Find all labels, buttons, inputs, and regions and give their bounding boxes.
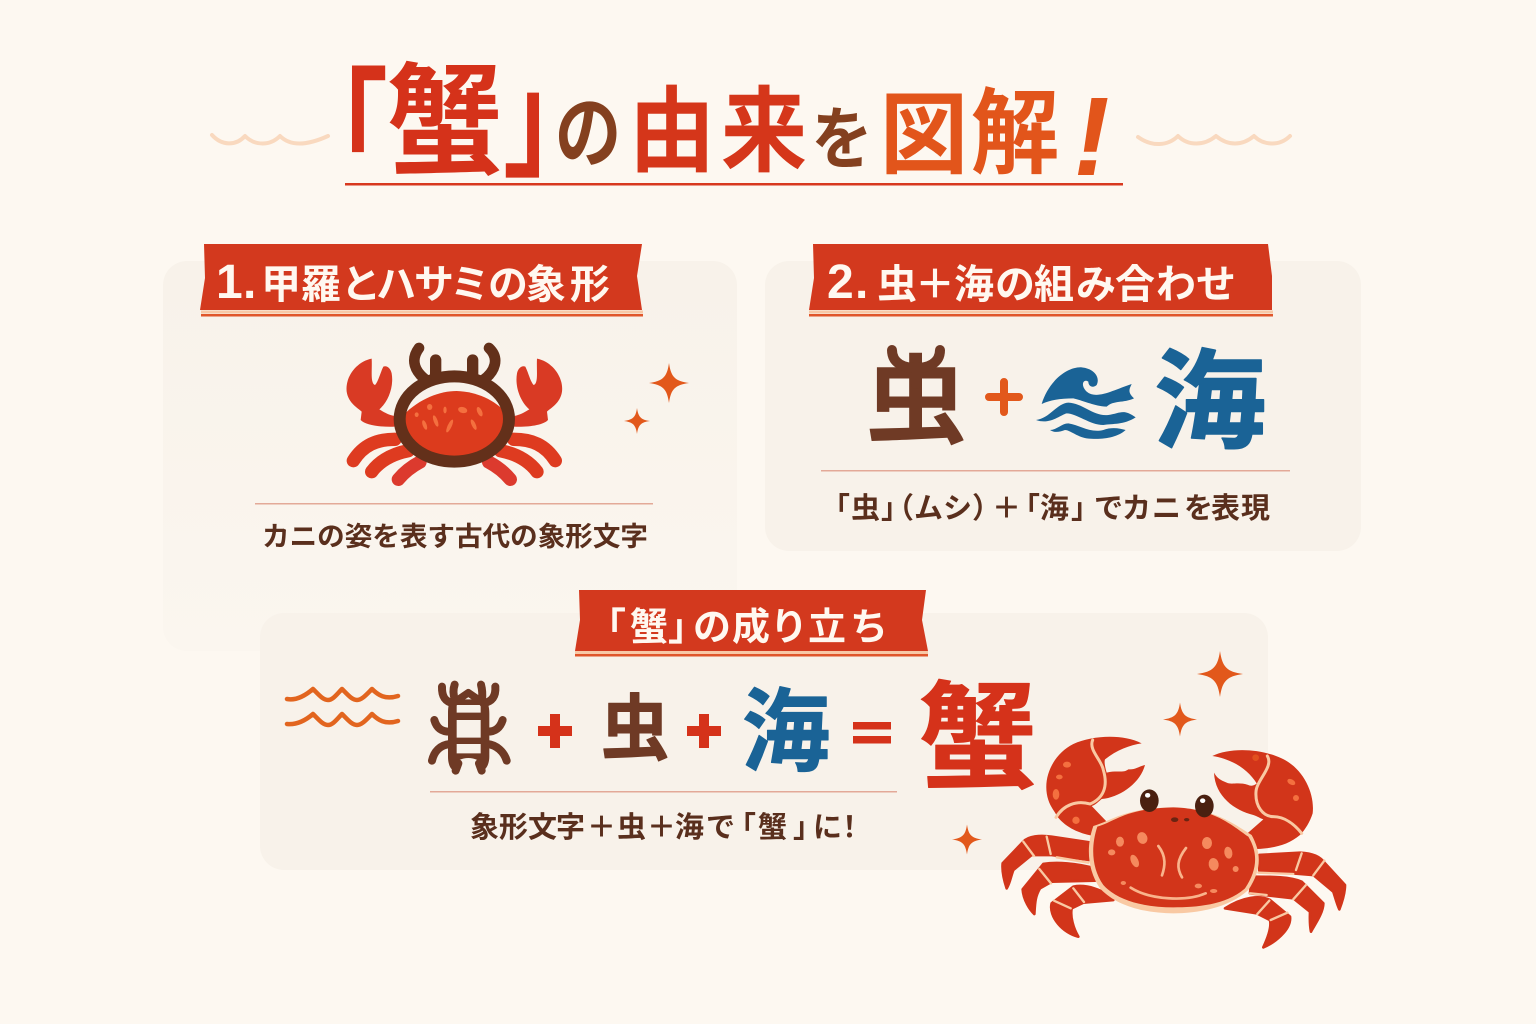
title text: 図 — [880, 84, 968, 185]
title text: 蟹 — [387, 56, 503, 191]
title text: ! — [1063, 74, 1122, 199]
character: insect small: 虫 — [601, 688, 669, 769]
icon: sparkle middle panel 3 — [1163, 702, 1197, 736]
large crab legs — [1002, 836, 1345, 947]
glyph body — [448, 699, 489, 770]
small crab shell — [399, 376, 509, 462]
character: sea: 海 — [1154, 343, 1266, 463]
character: sea small: 海 — [742, 681, 830, 782]
panel: origin of the character background — [260, 613, 1268, 870]
icon: sparkle top right panel 3 — [1197, 651, 1243, 697]
large crab eyes — [1140, 789, 1214, 822]
plus sign red two — [687, 714, 721, 748]
icon: small crab — [347, 348, 562, 479]
panel 2 heading banner: 虫＋海の組み合わせ — [877, 263, 1236, 307]
caption panel 2: 「虫」（ムシ）＋「海」でカニを表現 — [821, 492, 1270, 525]
small crab legs — [353, 439, 555, 479]
title text — [288, 44, 1122, 211]
title text: 解 — [971, 83, 1059, 187]
equals sign — [853, 722, 891, 744]
plus sign orange — [989, 382, 1019, 412]
icon: large crab — [1002, 737, 1345, 947]
large crab smile and creases — [1131, 846, 1206, 898]
divider panel 1 — [255, 503, 653, 504]
panel 1 heading banner: 甲羅とハサミの象形 — [261, 263, 610, 307]
icon: sparkle small panel 1 — [624, 408, 650, 434]
small crab right claw — [514, 359, 562, 427]
plus sign red one — [538, 714, 572, 748]
title — [212, 44, 1290, 211]
icon: blue wave — [1036, 367, 1136, 439]
caption panel 1: カニの姿を表す古代の象形文字 — [262, 522, 648, 552]
panel 1 heading banner — [200, 244, 643, 316]
panel 2 heading banner: 2. — [827, 256, 868, 309]
icon: sparkle bottom panel 3 — [952, 824, 982, 854]
title wave right — [1138, 136, 1290, 144]
small crab left claw — [347, 359, 395, 427]
panel 3 heading banner: 「蟹」の成り立ち — [588, 607, 888, 649]
title text: 来 — [721, 81, 807, 185]
large crab left claw — [1046, 737, 1145, 836]
small crab ring and antennae — [400, 348, 509, 462]
icon: pictograph crab glyph — [432, 685, 507, 771]
title text: 「 — [288, 59, 388, 211]
panel 3 heading banner — [575, 590, 928, 656]
panel 2 heading banner — [809, 244, 1273, 316]
title underline — [345, 183, 1123, 186]
panel 1 heading banner: 1. — [216, 256, 256, 309]
large crab body — [1089, 807, 1259, 913]
character: crab: 蟹 — [919, 673, 1037, 803]
title text: の — [555, 88, 621, 178]
icon: sparkle large panel 1 — [649, 363, 689, 403]
large crab right claw — [1212, 750, 1313, 849]
title text: 」 — [503, 44, 603, 194]
glyph limbs — [432, 685, 507, 771]
large crab leg seams — [1023, 837, 1324, 920]
caption panel 3: 象形文字＋虫＋海で「蟹」に！ — [470, 811, 864, 844]
icon: orange waves — [287, 689, 398, 725]
divider panel 3 — [430, 791, 897, 792]
title text: 由 — [629, 81, 715, 185]
title text: を — [811, 101, 873, 178]
large crab shell markings — [1108, 831, 1239, 893]
title wave left — [212, 135, 328, 144]
panel: 2 insect plus sea background — [765, 261, 1361, 551]
character: insect: 虫 — [865, 349, 967, 458]
divider panel 2 — [821, 470, 1290, 472]
small crab shell spots — [415, 404, 484, 433]
panel: 1 shell and claws background — [163, 261, 737, 651]
